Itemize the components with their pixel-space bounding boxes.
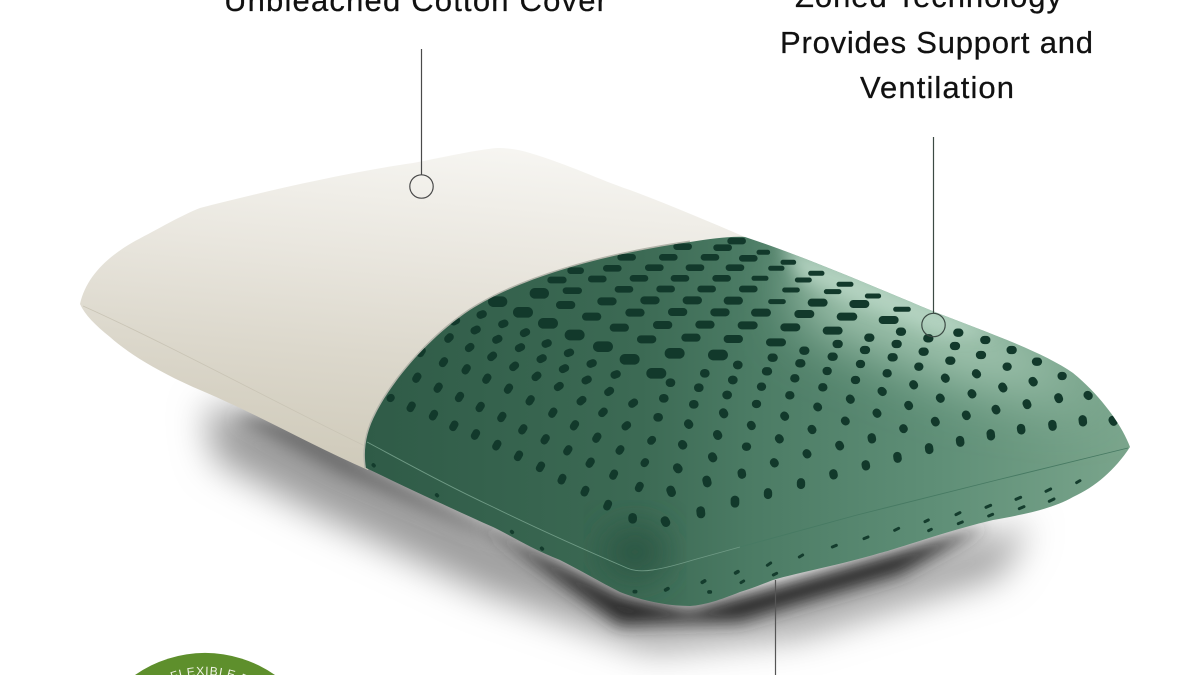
- side holes: [741, 481, 1080, 583]
- heading: zoned technology: [780, 0, 1093, 105]
- big round holes along the crease: [493, 293, 723, 373]
- foam seam: [367, 442, 740, 571]
- flat holes, back rows: [551, 241, 754, 291]
- small holes, central fan: [633, 365, 738, 523]
- badge: flexible foam: [135, 652, 275, 675]
- heading: zoned technology: Ventilation: [860, 70, 1014, 105]
- flat holes, middle rows: [560, 300, 739, 339]
- small tilted holes, left field: [390, 314, 652, 507]
- foam rim: [365, 242, 690, 468]
- top right flat holes: [754, 252, 908, 309]
- right large flat holes: [742, 303, 895, 342]
- heading: zoned technology: Provides Support and: [780, 25, 1093, 60]
- foam corner shadow: [603, 526, 667, 578]
- pillow: [80, 148, 1140, 610]
- right small holes: [742, 332, 1114, 495]
- pillow ground shadow: [205, 408, 1030, 650]
- foam top highlight: [800, 235, 1100, 400]
- callout: cover leader line and ring: [410, 49, 433, 198]
- callout: lower leader line: [774, 580, 776, 675]
- callout: zoned leader line and ring: [922, 137, 945, 337]
- cotton cover: [80, 148, 745, 470]
- green foam core: [360, 230, 1140, 610]
- cover seam: [83, 306, 367, 447]
